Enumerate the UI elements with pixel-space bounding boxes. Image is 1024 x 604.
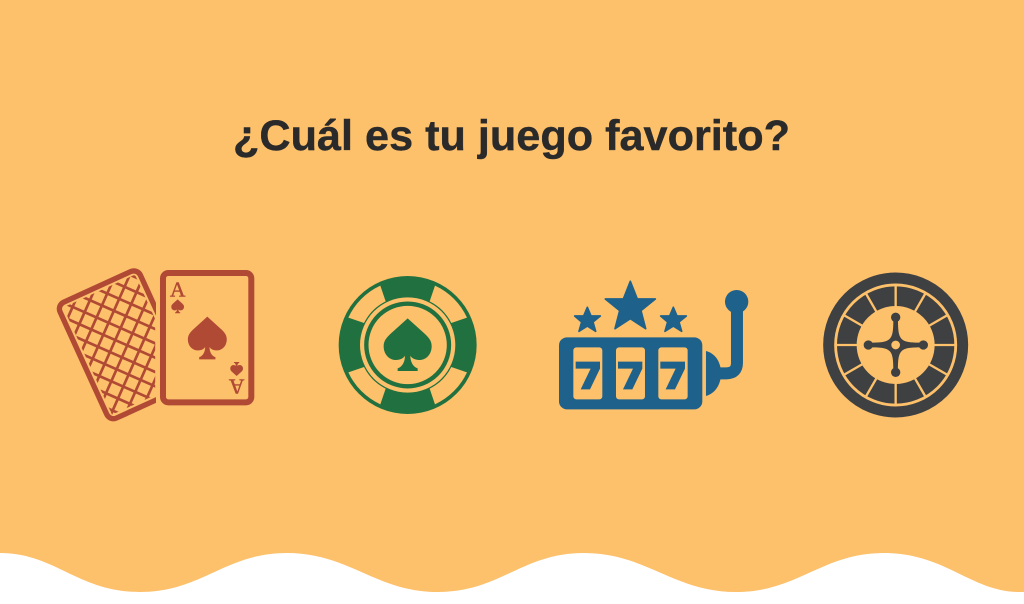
icon: playing cards <box>56 268 254 422</box>
machine body with reels <box>559 337 702 409</box>
card back with lattice <box>56 268 156 422</box>
centre cross <box>864 313 928 377</box>
lever <box>706 290 748 396</box>
card front: ace of spades: A <box>228 374 244 398</box>
icon: slot machine <box>559 281 748 409</box>
sevens <box>576 362 685 389</box>
icon: poker chip <box>339 276 477 414</box>
card front: ace of spades: A <box>170 278 186 302</box>
stars <box>575 281 686 331</box>
spade <box>384 318 432 371</box>
icon: roulette wheel <box>815 264 977 426</box>
wheel dividers <box>815 264 977 426</box>
card front: ace of spades <box>163 273 251 402</box>
title: ¿Cuál es tu juego favorito? <box>233 112 790 160</box>
